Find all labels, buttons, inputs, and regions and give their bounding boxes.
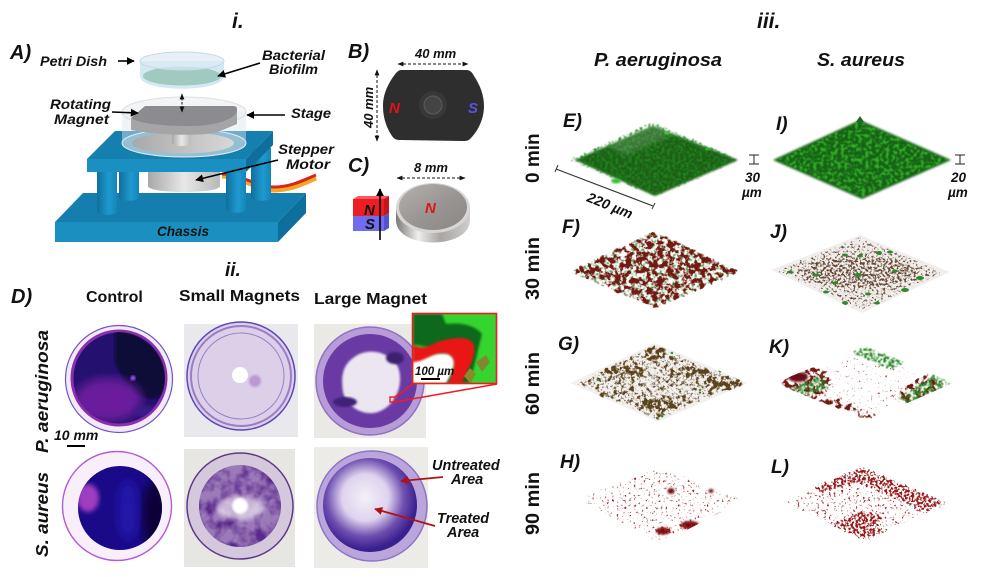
row label: S. aureus: S. aureus [32, 472, 52, 557]
control dish: S. aureus [62, 452, 172, 560]
polarity block [353, 189, 389, 240]
small magnets dish: P. aeruginosa [184, 322, 298, 437]
heading: section i: i. [232, 10, 244, 33]
small magnets dish: S. aureus [184, 449, 295, 567]
z scale: 20 µm [947, 155, 968, 200]
callout: treated area: Treated [437, 511, 490, 527]
large magnet dish: S. aureus [314, 447, 428, 568]
label: J) [770, 222, 787, 243]
callout: treated area [375, 509, 490, 541]
transparent stage [122, 97, 246, 157]
component labels: Biofilm [269, 61, 318, 77]
panel I: S. aureus 0 min [773, 114, 968, 200]
panel H: P. aeruginosa 90 min [560, 454, 740, 540]
column headers: Small Magnets [179, 288, 300, 305]
label: I) [776, 114, 788, 135]
icon: cable [222, 174, 316, 190]
panel L: S. aureus 90 min [771, 457, 952, 542]
panel F: P. aeruginosa 30 min [562, 217, 744, 310]
top plate [87, 131, 273, 172]
label: E) [563, 111, 582, 132]
callout: untreated area [401, 458, 501, 488]
speckled surface [580, 470, 740, 540]
time labels: 60 min [523, 352, 544, 415]
heading: section ii: ii. [225, 260, 241, 281]
label: C): C) [348, 155, 369, 177]
dimension: 220 µm: 220 µm [584, 189, 635, 222]
chassis base [55, 193, 306, 242]
callout: untreated area: Untreated [432, 458, 501, 474]
heading: section iii: iii. [757, 10, 780, 33]
component labels: Stepper [278, 141, 336, 157]
polarity block: N [364, 202, 376, 219]
time labels: 90 min [523, 472, 544, 535]
large magnet dish: P. aeruginosa [314, 324, 426, 438]
biofilm surface [773, 116, 951, 199]
inset micrograph: 100 µm [415, 366, 454, 378]
rotating magnet [131, 106, 237, 135]
row label: P. aeruginosa: P. aeruginosa [32, 330, 52, 453]
component labels: Stage [291, 105, 331, 121]
width dimension: 8 mm [414, 160, 448, 175]
pole N: N [389, 100, 401, 117]
z scale: 30 µm [741, 155, 762, 200]
label: B): B) [348, 41, 369, 63]
zoom indicator [390, 384, 497, 402]
panel A: apparatus diagram [9, 42, 336, 242]
speckled surface [788, 467, 946, 540]
column headers: Large Magnet [314, 291, 428, 308]
component labels: Magnet [54, 111, 111, 127]
inset micrograph [412, 314, 496, 384]
z scale: 20 µm: 20 [950, 170, 967, 185]
z scale: 30 µm: 30 [745, 170, 761, 185]
component labels: Petri Dish [40, 53, 107, 69]
label: H) [560, 452, 580, 473]
arrows [112, 61, 285, 180]
double arrow [181, 94, 183, 112]
label: F) [562, 217, 580, 238]
column heading: P. aeruginosa: P. aeruginosa [594, 50, 722, 70]
callout: untreated area: Area [450, 472, 483, 488]
polarity block: S [365, 216, 375, 233]
z scale: 30 µm: µm [741, 185, 762, 200]
callout: treated area: Area [446, 525, 479, 541]
control dish: P. aeruginosa [66, 326, 172, 432]
panel D: petri dish photo grid [11, 286, 501, 568]
center screw [419, 91, 447, 119]
component labels [40, 47, 336, 239]
magnet shape [383, 70, 484, 141]
label: L) [771, 457, 789, 478]
z scale: 20 µm: µm [947, 185, 968, 200]
time labels: 30 min [523, 237, 544, 300]
dimension: 220 µm [555, 165, 655, 222]
column headers: Control [86, 289, 143, 306]
biofilm surface [565, 120, 744, 198]
speckled surface [572, 232, 738, 308]
panel C: small magnet [348, 155, 470, 242]
label: A): A) [9, 42, 31, 64]
component labels: Motor [286, 156, 332, 172]
label: D): D) [11, 286, 32, 308]
panel J: S. aureus 30 min [770, 222, 950, 313]
stepper motor body [148, 168, 220, 192]
width dimension: 40 mm [414, 46, 457, 61]
pole S: S [468, 100, 478, 117]
panel G: P. aeruginosa 60 min [558, 334, 748, 422]
component labels: Chassis [157, 223, 209, 239]
speckled surface [775, 345, 953, 421]
speckled surface [570, 343, 748, 422]
petri dish [140, 52, 224, 89]
height dimension: 40 mm [361, 86, 376, 129]
panel E: P. aeruginosa 0 min [555, 111, 762, 222]
column heading: S. aureus: S. aureus [817, 50, 905, 70]
component labels: Rotating [50, 96, 111, 112]
disc magnet: N [425, 200, 437, 217]
label: K) [769, 337, 789, 358]
scale bar: 10 mm: 10 mm [54, 427, 98, 443]
column headers [86, 288, 428, 308]
back and front legs [97, 148, 271, 215]
panel B: large magnet photo [348, 41, 484, 141]
speckled surface [771, 235, 950, 313]
component labels: Bacterial [262, 47, 326, 63]
rotating disc and shaft [132, 130, 234, 154]
panel K: S. aureus 60 min [769, 337, 953, 421]
time labels: 0 min [523, 133, 544, 183]
label: G) [558, 334, 579, 355]
time labels [523, 133, 544, 535]
